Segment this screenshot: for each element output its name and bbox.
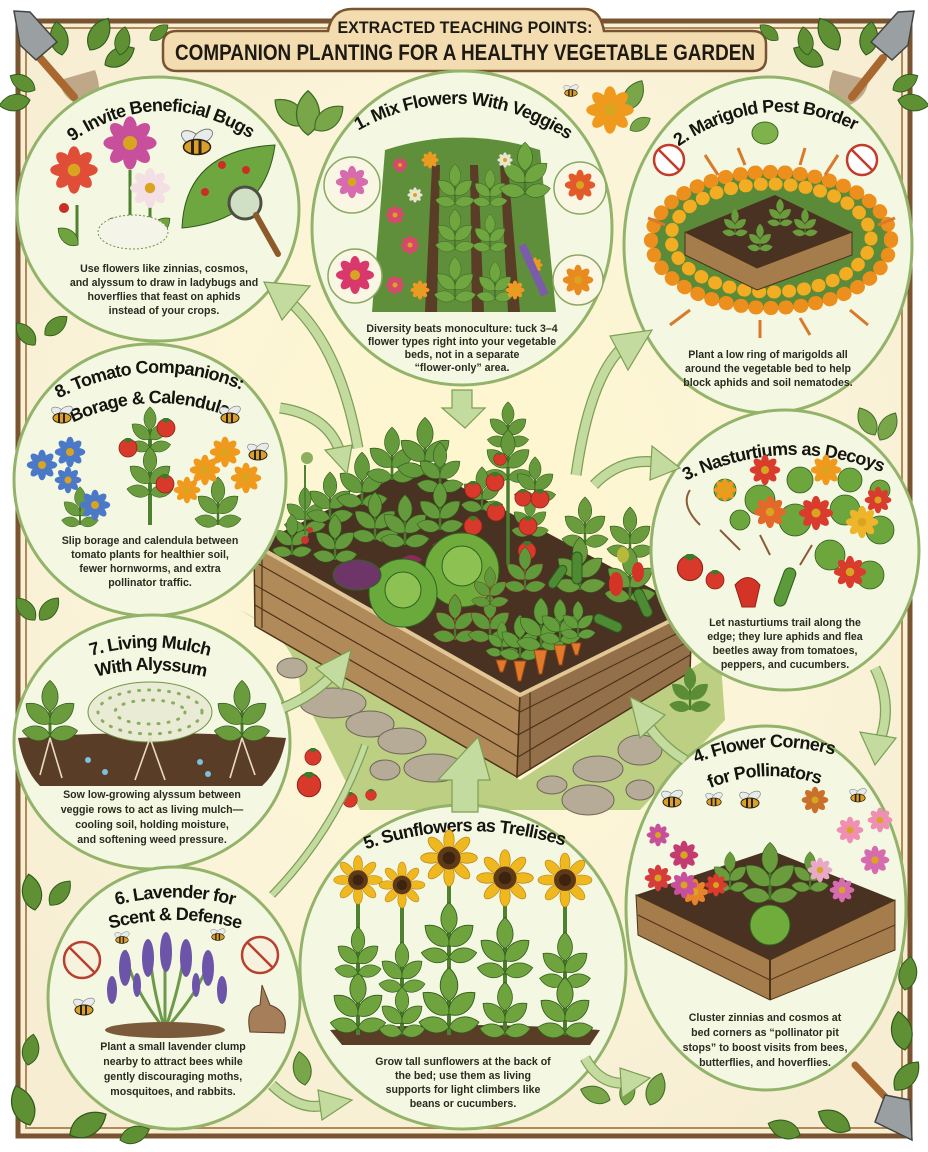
heading	[54, 360, 244, 422]
body text: tomato plants for healthier soil,	[71, 549, 229, 561]
body text: Let nasturtiums trail along the	[709, 617, 861, 629]
arrow: to panel 9	[264, 282, 358, 448]
panel: 4 Flower Corners for Pollinators	[624, 724, 908, 1092]
body text: flower types right into your vegetable	[368, 336, 556, 348]
body text: peppers, and cucumbers.	[721, 659, 849, 671]
heading: 9. Invite Beneficial Bugs	[67, 98, 254, 140]
body text: Slip borage and calendula between	[62, 535, 238, 547]
stepping stones	[277, 658, 662, 815]
panel: 1 Mix Flowers With Veggies	[310, 70, 614, 386]
banner subtitle: EXTRACTED TEACHING POINTS:	[338, 18, 592, 37]
nasturtiums and vegetables illustration	[677, 455, 894, 608]
arrow: panel 4 to bed	[630, 697, 685, 760]
tomato and flowers illustration	[27, 404, 270, 529]
body text: bed corners as “pollinator pit	[691, 1027, 839, 1039]
heading: Borage & Calendula	[70, 390, 229, 422]
panel: 9 Invite Beneficial Bugs	[16, 76, 300, 342]
panel: 2 Marigold Pest Border	[622, 76, 914, 414]
arrow: panel 6 to panel 5	[272, 1085, 352, 1120]
arrows	[264, 282, 896, 1120]
body text: block aphids and soil nematodes.	[683, 377, 853, 389]
heading	[108, 884, 242, 928]
garden rows illustration	[324, 138, 606, 312]
body text: veggie rows to act as living mulch—	[61, 804, 244, 816]
body text: edge; they lure aphids and flea	[707, 631, 863, 643]
sunflowers illustration	[329, 830, 600, 1045]
body text: the bed; use them as living	[395, 1070, 531, 1082]
heading: 7. Living Mulch	[88, 635, 210, 656]
body text: Plant a small lavender clump	[100, 1041, 246, 1053]
body text	[683, 1012, 847, 1069]
arrow: panel 6 to bed	[272, 745, 365, 895]
corner decoration: bottom-left vines	[6, 311, 152, 1148]
body text: supports for light climbers like	[386, 1084, 541, 1096]
body text: “flower-only” area.	[415, 362, 509, 374]
bed soil	[255, 465, 692, 695]
arrow: panel 5 to bed	[438, 737, 490, 812]
arrow: to panel 3	[594, 446, 680, 485]
heading: 5. Sunflowers as Trellises	[363, 820, 566, 848]
bed rim highlight	[255, 545, 692, 695]
body text: stops” to boost visits from bees,	[683, 1042, 847, 1054]
panel: 3 Nasturtiums as Decoys	[650, 408, 920, 692]
heading: 1. Mix Flowers With Veggies	[354, 92, 572, 138]
corner decoration: top-left trowel and vines	[0, 11, 172, 113]
ground and grass	[240, 610, 725, 810]
heading: With Alyssum	[94, 657, 206, 677]
flowers and leaf illustration	[50, 116, 278, 254]
banner title: COMPANION PLANTING FOR A HEALTHY VEGETABLE GARDEN	[175, 40, 755, 65]
body text	[683, 349, 853, 389]
body text: Plant a low ring of marigolds all	[688, 349, 848, 361]
heading: 6. Lavender for	[115, 884, 236, 904]
panel: 5 Sunflowers as Trellises	[298, 804, 628, 1130]
arrow: from panel 1 to bed	[442, 390, 485, 428]
corner grass tuft	[668, 667, 712, 714]
body text: hoverflies that feast on aphids	[87, 291, 241, 303]
lettuce heads	[333, 533, 499, 627]
pepper and cucumber plants	[546, 497, 657, 634]
body text: nearby to attract bees while	[103, 1056, 243, 1068]
arrow: panel 7 to bed	[283, 650, 351, 708]
panel: 6 Lavender for Scent & Defense	[46, 866, 302, 1130]
raised bed with flowers illustration	[636, 787, 895, 1000]
marigold ring illustration	[648, 122, 895, 338]
panel: 7 Living Mulch With Alyssum	[12, 614, 292, 870]
tomato plant	[460, 402, 557, 565]
body text	[61, 789, 244, 846]
body text: beetles away from tomatoes,	[713, 645, 857, 657]
heading: 2. Marigold Pest Border	[674, 100, 859, 146]
heading	[88, 635, 210, 677]
lavender illustration	[64, 927, 285, 1038]
heading: Scent & Defense	[108, 908, 242, 928]
body text: beans or cucumbers.	[410, 1098, 516, 1110]
body text: around the vegetable bed to help	[685, 363, 852, 375]
central raised bed scene	[240, 402, 725, 815]
body text: Sow low-growing alyssum between	[63, 789, 241, 801]
arrow: to panel 2	[576, 330, 652, 475]
corner decoration: bottom-right trowel and vines	[765, 955, 926, 1143]
body text: pollinator traffic.	[108, 577, 192, 589]
arrow: from panel 8 to bed	[280, 408, 352, 474]
body text	[707, 617, 863, 671]
body text: fewer hornworms, and extra	[79, 563, 221, 575]
body text: mosquitoes, and rabbits.	[110, 1086, 236, 1098]
heading: 3. Nasturtiums as Decoys	[682, 444, 884, 480]
flower insets	[324, 157, 380, 213]
heading: 4. Flower Corners	[694, 734, 835, 762]
chard and carrots	[432, 547, 596, 681]
heading: for Pollinators	[707, 763, 822, 788]
arrow: panel 3 to panel 4	[860, 668, 896, 765]
body text: beds, not in a separate	[405, 349, 520, 361]
leafy greens back row	[271, 417, 464, 564]
body text: cooling soil, holding moisture,	[75, 819, 229, 831]
arrow: panel 5 to panel 4	[585, 1058, 650, 1098]
body text: butterflies, and hoverflies.	[699, 1057, 831, 1069]
body text: Cluster zinnias and cosmos at	[689, 1012, 842, 1024]
bed right wall	[517, 610, 692, 777]
title banner	[163, 9, 766, 71]
body text: instead of your crops.	[109, 305, 219, 317]
heading: 8. Tomato Companions:	[54, 360, 244, 398]
panel: 8 Tomato Companions	[12, 342, 288, 616]
heading	[694, 734, 835, 788]
body text	[100, 1041, 246, 1098]
body text: Grow tall sunflowers at the back of	[375, 1056, 551, 1068]
body text	[70, 263, 258, 317]
decorative leaf sprigs between panels	[269, 76, 903, 1108]
body text: gently discouraging moths,	[104, 1071, 242, 1083]
body text	[375, 1056, 551, 1110]
body text: and alyssum to draw in ladybugs and	[70, 277, 258, 289]
body text: Diversity beats monoculture: tuck 3–4	[366, 323, 558, 335]
body text	[366, 323, 558, 374]
corner decoration: top-right trowel and vines	[756, 11, 928, 113]
red flowers in path	[297, 748, 376, 807]
soil cross-section illustration	[18, 680, 286, 786]
body text: and softening weed pressure.	[77, 834, 227, 846]
body text: Use flowers like zinnias, cosmos,	[80, 263, 248, 275]
bed left wall	[254, 545, 520, 777]
body text	[62, 535, 238, 589]
marigold ornament with bee	[563, 83, 634, 134]
beet tops and red buds	[301, 452, 455, 566]
